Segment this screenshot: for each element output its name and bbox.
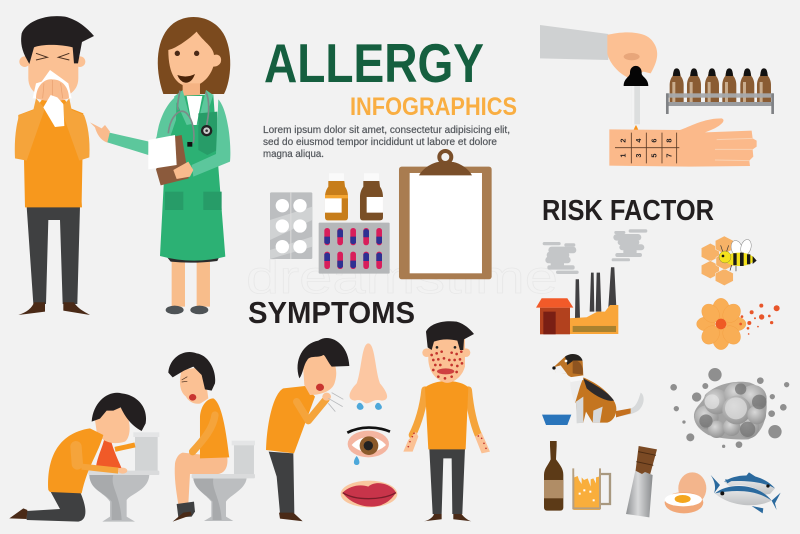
hanging tissue bbox=[43, 95, 64, 127]
intro text bbox=[263, 125, 510, 160]
risk factor heading: RISK FACTOR bbox=[542, 195, 714, 227]
ears bbox=[19, 56, 30, 67]
medicine and clipboard group bbox=[270, 151, 492, 279]
chest bbox=[570, 377, 583, 403]
vomit bbox=[96, 435, 122, 468]
torso bbox=[266, 386, 315, 453]
toilet bbox=[192, 441, 255, 521]
clipboard bbox=[399, 151, 492, 279]
sleeve bbox=[540, 25, 608, 60]
test grid numbers: 4 bbox=[634, 138, 643, 143]
test grid numbers: 1 bbox=[618, 154, 627, 158]
test grid numbers bbox=[618, 138, 673, 158]
intro text: sed do eiusmod tempor incididunt ut labore et dolore bbox=[263, 137, 497, 148]
coughing man bbox=[266, 338, 349, 521]
test arm bbox=[609, 118, 757, 167]
head bbox=[180, 367, 208, 404]
rash dots bbox=[407, 350, 487, 449]
hair bbox=[92, 393, 146, 431]
test grid numbers: 5 bbox=[650, 154, 659, 158]
shoe bbox=[173, 512, 192, 522]
test grid bbox=[615, 133, 679, 163]
hem bbox=[167, 257, 219, 263]
hair bbox=[21, 16, 94, 64]
test grid numbers: 3 bbox=[634, 154, 643, 158]
dust particles cloud bbox=[670, 368, 789, 448]
near arm bbox=[76, 447, 77, 464]
dog bbox=[552, 354, 644, 423]
collar bbox=[174, 90, 213, 125]
eyes and mouth bbox=[175, 51, 180, 56]
finger lines bbox=[43, 80, 63, 99]
sleeves bbox=[15, 98, 90, 161]
mouth bbox=[316, 384, 324, 391]
cloud base bbox=[694, 382, 767, 439]
factory bbox=[536, 267, 618, 334]
swollen mouth bbox=[437, 368, 454, 374]
dog body bbox=[571, 377, 616, 423]
sitting man on toilet bbox=[168, 352, 255, 522]
right sleeve bbox=[192, 99, 230, 177]
face bbox=[28, 43, 78, 98]
gown bbox=[159, 94, 225, 261]
arm bbox=[193, 415, 215, 452]
ear bbox=[573, 361, 583, 375]
hair bbox=[426, 321, 474, 350]
toilet bbox=[88, 432, 159, 522]
arm bbox=[297, 399, 326, 421]
hand bbox=[322, 393, 331, 401]
trousers bbox=[27, 207, 80, 304]
cough lines bbox=[328, 393, 343, 412]
hand holding dropper bbox=[607, 32, 657, 78]
legs bbox=[172, 258, 185, 307]
capsule tray bbox=[319, 223, 390, 274]
pointing arm bbox=[107, 132, 149, 155]
face bbox=[428, 338, 465, 383]
trousers and shoe bbox=[27, 491, 85, 522]
test grid numbers: 7 bbox=[664, 154, 673, 158]
egg bbox=[665, 472, 706, 513]
closed eyes bbox=[36, 53, 69, 60]
watery eye bbox=[347, 428, 390, 465]
pointing hand bbox=[90, 122, 110, 143]
test grid numbers: 6 bbox=[650, 139, 659, 143]
chocolate bar bbox=[626, 446, 657, 517]
risk factors lower group bbox=[542, 354, 789, 517]
trousers at ankles bbox=[177, 502, 195, 517]
intro text: magna aliqua. bbox=[263, 149, 324, 160]
dog head bbox=[553, 354, 583, 378]
tissue behind hands bbox=[33, 70, 72, 98]
mouth bbox=[189, 394, 196, 401]
stethoscope bbox=[168, 91, 209, 143]
orange bottle bbox=[325, 173, 348, 220]
eyes bbox=[436, 346, 438, 349]
finger gaps bbox=[715, 138, 753, 161]
subtitle: INFOGRAPHICS bbox=[350, 93, 517, 121]
clipboard bbox=[156, 135, 189, 185]
dropper bbox=[624, 66, 648, 140]
paper bbox=[148, 135, 177, 169]
man with rash bbox=[403, 321, 490, 521]
vomiting man at toilet bbox=[9, 393, 159, 522]
fish bbox=[711, 472, 781, 513]
beer mug bbox=[573, 468, 610, 510]
doctor bbox=[90, 17, 230, 314]
left sleeve bbox=[148, 96, 177, 157]
sweater bbox=[18, 100, 83, 207]
test grid numbers: 8 bbox=[664, 139, 673, 143]
collar bbox=[569, 375, 583, 382]
runny nose bbox=[350, 343, 387, 410]
blister pack bbox=[270, 192, 312, 259]
saddle bbox=[583, 378, 614, 401]
hair bbox=[168, 352, 215, 391]
head bbox=[95, 407, 130, 443]
far arm bbox=[115, 445, 135, 449]
torso bbox=[200, 398, 229, 458]
flower and pollen bbox=[697, 298, 780, 350]
hair bbox=[158, 17, 230, 94]
intro text: Lorem ipsum dolor sit amet, consectetur adipisicing elit, bbox=[263, 125, 510, 136]
hands bbox=[36, 79, 69, 101]
hand shadow bbox=[624, 53, 640, 60]
bee and honeycomb bbox=[701, 236, 757, 286]
dog bowl bbox=[542, 415, 571, 425]
shoes bbox=[18, 302, 90, 315]
tail bbox=[616, 393, 644, 417]
lower pockets bbox=[165, 192, 183, 210]
closed eye bbox=[182, 377, 187, 382]
shoes bbox=[166, 306, 184, 314]
shirt bbox=[187, 96, 202, 125]
arms bbox=[412, 390, 478, 435]
torso bbox=[48, 428, 103, 493]
brown bottle bbox=[360, 173, 383, 220]
hand on clipboard bbox=[173, 162, 193, 179]
swollen lips bbox=[341, 481, 397, 507]
vials on rack bbox=[666, 68, 774, 114]
hair bbox=[298, 338, 349, 378]
skin test group bbox=[536, 25, 780, 350]
chest pocket bbox=[198, 112, 217, 155]
man sneezing into tissue bbox=[15, 16, 94, 315]
shoe bbox=[279, 513, 303, 521]
watermark: dreamstime bbox=[246, 251, 558, 303]
trousers bbox=[269, 452, 294, 513]
face bbox=[168, 32, 221, 87]
test grid numbers: 2 bbox=[618, 139, 627, 143]
trousers bbox=[429, 448, 465, 514]
legs bbox=[576, 397, 603, 423]
forearms and hands bbox=[403, 432, 490, 453]
shoes bbox=[424, 514, 471, 521]
title: ALLERGY bbox=[264, 32, 484, 94]
smoke bbox=[543, 229, 647, 274]
torso bbox=[425, 381, 468, 449]
bottle bbox=[544, 441, 563, 511]
head bbox=[303, 353, 336, 395]
bare legs bbox=[175, 453, 227, 504]
symptoms heading: SYMPTOMS bbox=[248, 295, 415, 330]
